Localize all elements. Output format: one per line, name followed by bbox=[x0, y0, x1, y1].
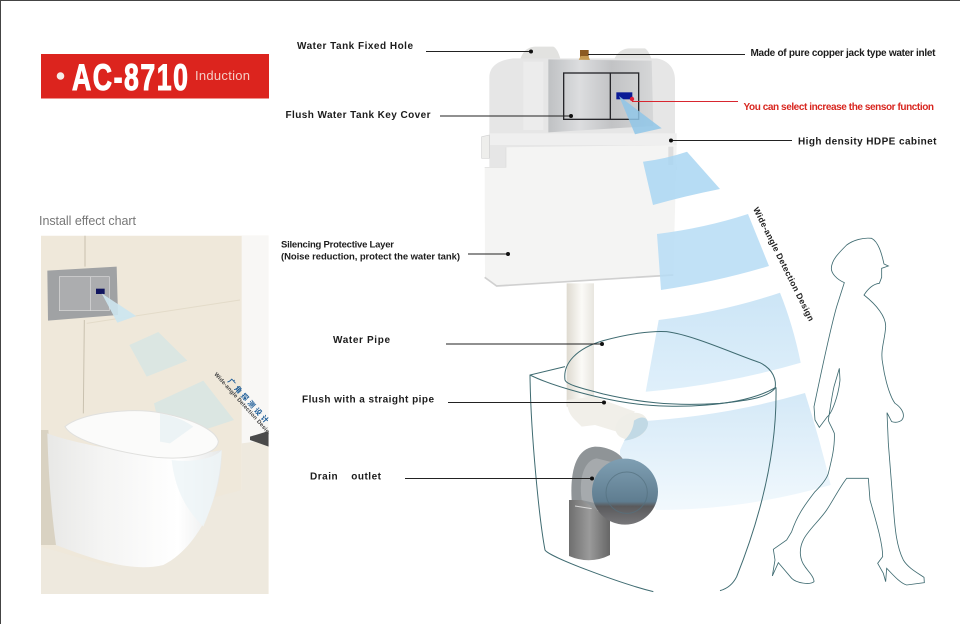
callout: water pipe bbox=[333, 335, 604, 346]
sensor window bbox=[616, 92, 632, 99]
callout: sensor function bbox=[630, 97, 934, 113]
panel: install photo bbox=[41, 236, 279, 594]
title banner bbox=[41, 54, 269, 98]
callout: straight pipe: Flush with a straight pipe bbox=[302, 394, 434, 406]
callout: straight pipe bbox=[302, 394, 606, 406]
fan 1 bbox=[619, 96, 662, 134]
title banner: Induction bbox=[195, 68, 250, 83]
title banner: AC-8710 bbox=[72, 57, 188, 98]
callout: silencing layer: Silencing Protective Layer bbox=[281, 240, 394, 250]
photo fans bbox=[118, 304, 234, 428]
copper water inlet bbox=[579, 50, 590, 60]
photo rotated label: Wide-angle Detection Design bbox=[213, 372, 273, 438]
tank fixing tabs bbox=[520, 47, 653, 62]
callout: water tank fixed hole: Water Tank Fixed Hole bbox=[297, 41, 413, 52]
drain outlet bbox=[569, 447, 658, 560]
fan 2 bbox=[643, 152, 720, 205]
photo toilet bbox=[47, 411, 222, 567]
callout: HDPE cabinet bbox=[669, 136, 937, 148]
flush plate bbox=[548, 59, 653, 132]
fan 5 bbox=[620, 393, 831, 510]
photo flush plate bbox=[47, 267, 136, 323]
person silhouette bbox=[772, 238, 924, 585]
water tank bbox=[482, 47, 677, 286]
callout: drain outlet: Drain outlet bbox=[310, 472, 382, 482]
callout: HDPE cabinet: High density HDPE cabinet bbox=[798, 136, 937, 148]
water pipe bbox=[567, 283, 652, 444]
callout: drain outlet bbox=[310, 472, 594, 482]
callout: key cover bbox=[286, 110, 573, 121]
plate key outline bbox=[564, 73, 639, 119]
callout: water tank fixed hole bbox=[297, 41, 533, 54]
detection label: Wide-angle Detection Design bbox=[751, 205, 816, 323]
callout: silencing layer bbox=[281, 240, 510, 262]
callout: sensor function: You can select increase the sensor function bbox=[744, 102, 934, 113]
callout: copper water inlet: Made of pure copper jack type water inlet bbox=[750, 48, 936, 59]
fan 3 bbox=[657, 214, 769, 290]
callout: silencing layer: (Noise reduction, protect the water tank) bbox=[281, 252, 460, 262]
photo rotated label: 广角探测设计 bbox=[226, 377, 271, 425]
toilet outline bbox=[530, 331, 776, 592]
detection fans bbox=[619, 96, 831, 510]
callout: water pipe: Water Pipe bbox=[333, 335, 390, 346]
fan 4 bbox=[646, 293, 801, 392]
front silencing cover bbox=[485, 145, 677, 286]
callout: key cover: Flush Water Tank Key Cover bbox=[286, 110, 431, 121]
tank upper body bbox=[489, 58, 677, 170]
heading: install effect chart: Install effect chart bbox=[39, 214, 137, 228]
